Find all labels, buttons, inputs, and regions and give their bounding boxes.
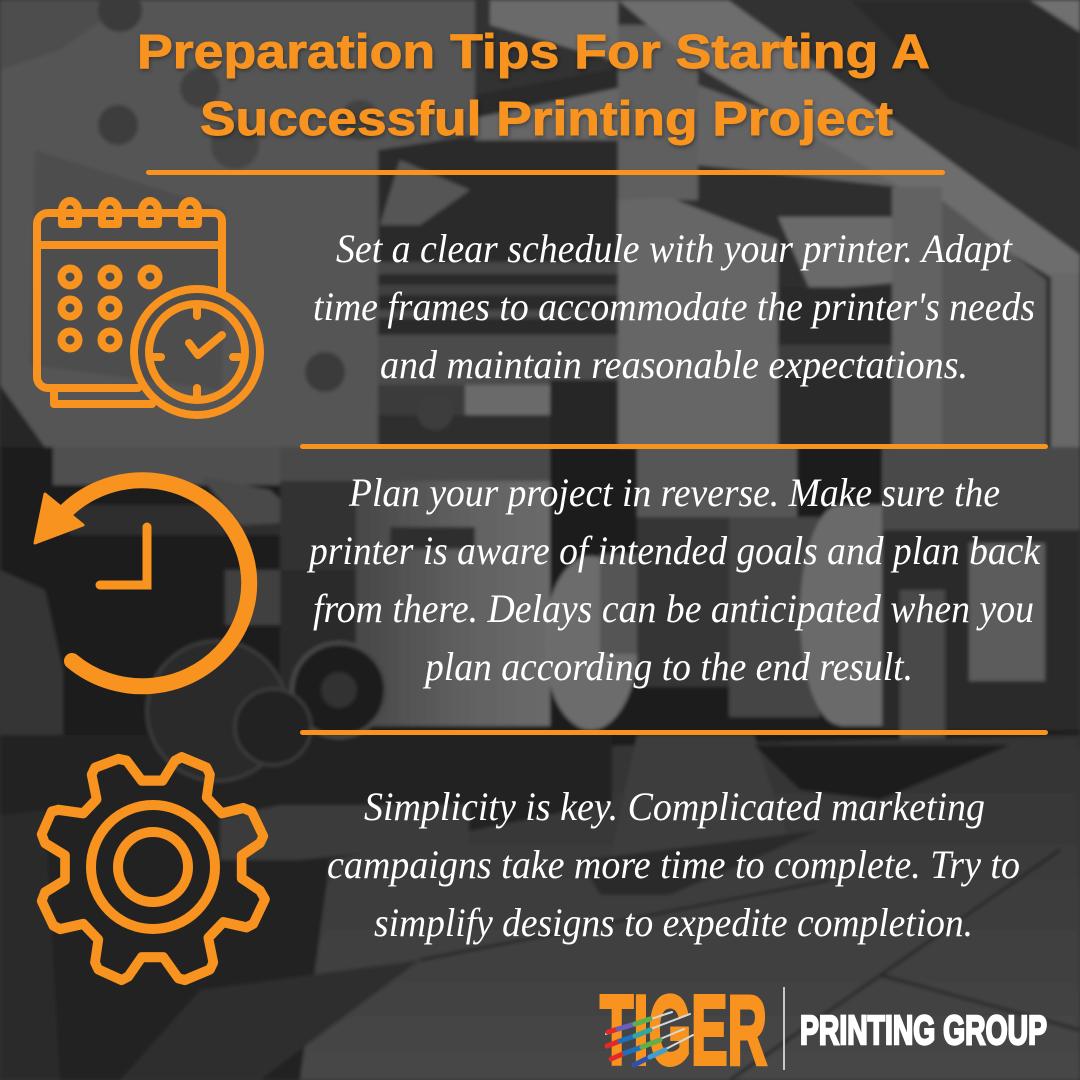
logo: Tiger Printing Group xyxy=(600,975,1047,1080)
text: simplicity tip: Simplicity is key. Complicated marketing xyxy=(364,784,985,829)
text: simplicity tip: campaigns take more time to complete. Try to xyxy=(327,842,1020,887)
text: schedule tip: time frames to accommodate the printer's needs xyxy=(313,284,1035,329)
text: reverse planning tip: printer is aware of intended goals and plan back xyxy=(306,528,1041,573)
icon: gear xyxy=(42,757,265,980)
floor xyxy=(0,735,1080,1080)
left machine panel xyxy=(0,0,475,447)
text: reverse planning tip xyxy=(306,470,1041,689)
title xyxy=(137,26,930,146)
text: schedule tip: and maintain reasonable expectations. xyxy=(380,342,968,387)
text: simplicity tip xyxy=(327,784,1020,945)
icon: calendar with clock xyxy=(37,201,260,415)
lower press xyxy=(0,447,1080,747)
icon: reverse clock xyxy=(35,480,249,686)
text: schedule tip: Set a clear schedule with your printer. Adapt xyxy=(336,226,1013,271)
text: schedule tip xyxy=(313,226,1035,387)
title: Preparation Tips For Starting A xyxy=(137,26,930,79)
title: Successful Printing Project xyxy=(200,93,893,146)
text: reverse planning tip: from there. Delays can be anticipated when you xyxy=(313,586,1034,631)
text: reverse planning tip: plan according to the end result. xyxy=(422,644,913,689)
text: simplicity tip: simplify designs to expedite completion. xyxy=(374,900,973,945)
text: reverse planning tip: Plan your project in reverse. Make sure the xyxy=(348,470,1000,515)
